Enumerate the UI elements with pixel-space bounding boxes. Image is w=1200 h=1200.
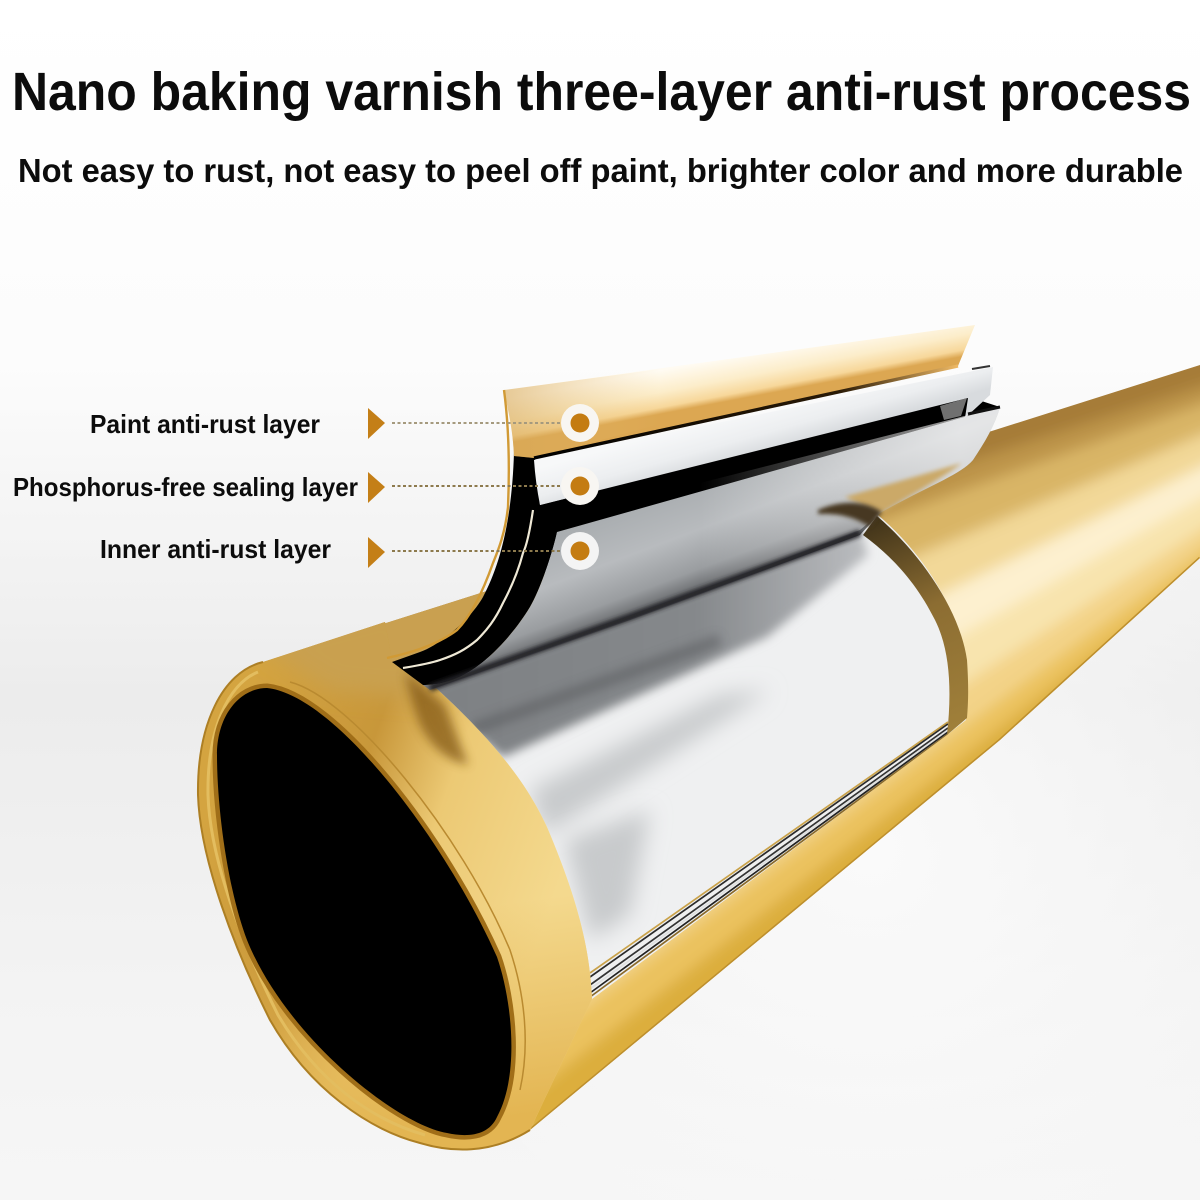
inner anti-rust layer sheet <box>423 407 1000 690</box>
callout: paint anti-rust layer: Paint anti-rust layer <box>90 409 320 439</box>
black gaps between layers <box>392 396 1000 685</box>
subtitle: Not easy to rust, not easy to peel off paint, brighter color and more durable <box>18 152 1183 189</box>
inner lip of rim <box>217 688 511 1135</box>
gold reflection on inner sheet <box>845 463 962 514</box>
tube bore <box>217 688 511 1135</box>
gold tube body <box>263 365 1200 1130</box>
phosphorus-free sealing layer sheet <box>534 366 993 505</box>
callout: phosphorus-free sealing layer: Phosphorus-free sealing layer <box>13 472 358 502</box>
thin white layer edge line <box>403 510 533 668</box>
silver inner tube window <box>436 515 966 999</box>
dark fold below inner sheet <box>430 533 860 688</box>
callout: paint anti-rust layer <box>90 404 599 442</box>
paint anti-rust layer sheet <box>387 325 975 658</box>
callout: phosphorus-free sealing layer <box>13 467 599 505</box>
callout: inner anti-rust layer: Inner anti-rust layer <box>100 534 331 564</box>
window end ring <box>863 516 968 735</box>
top of window ring <box>818 503 882 527</box>
edge of layered stripes <box>590 722 948 997</box>
callout: inner anti-rust layer <box>100 532 599 570</box>
tube end rim and collar <box>196 622 592 1150</box>
